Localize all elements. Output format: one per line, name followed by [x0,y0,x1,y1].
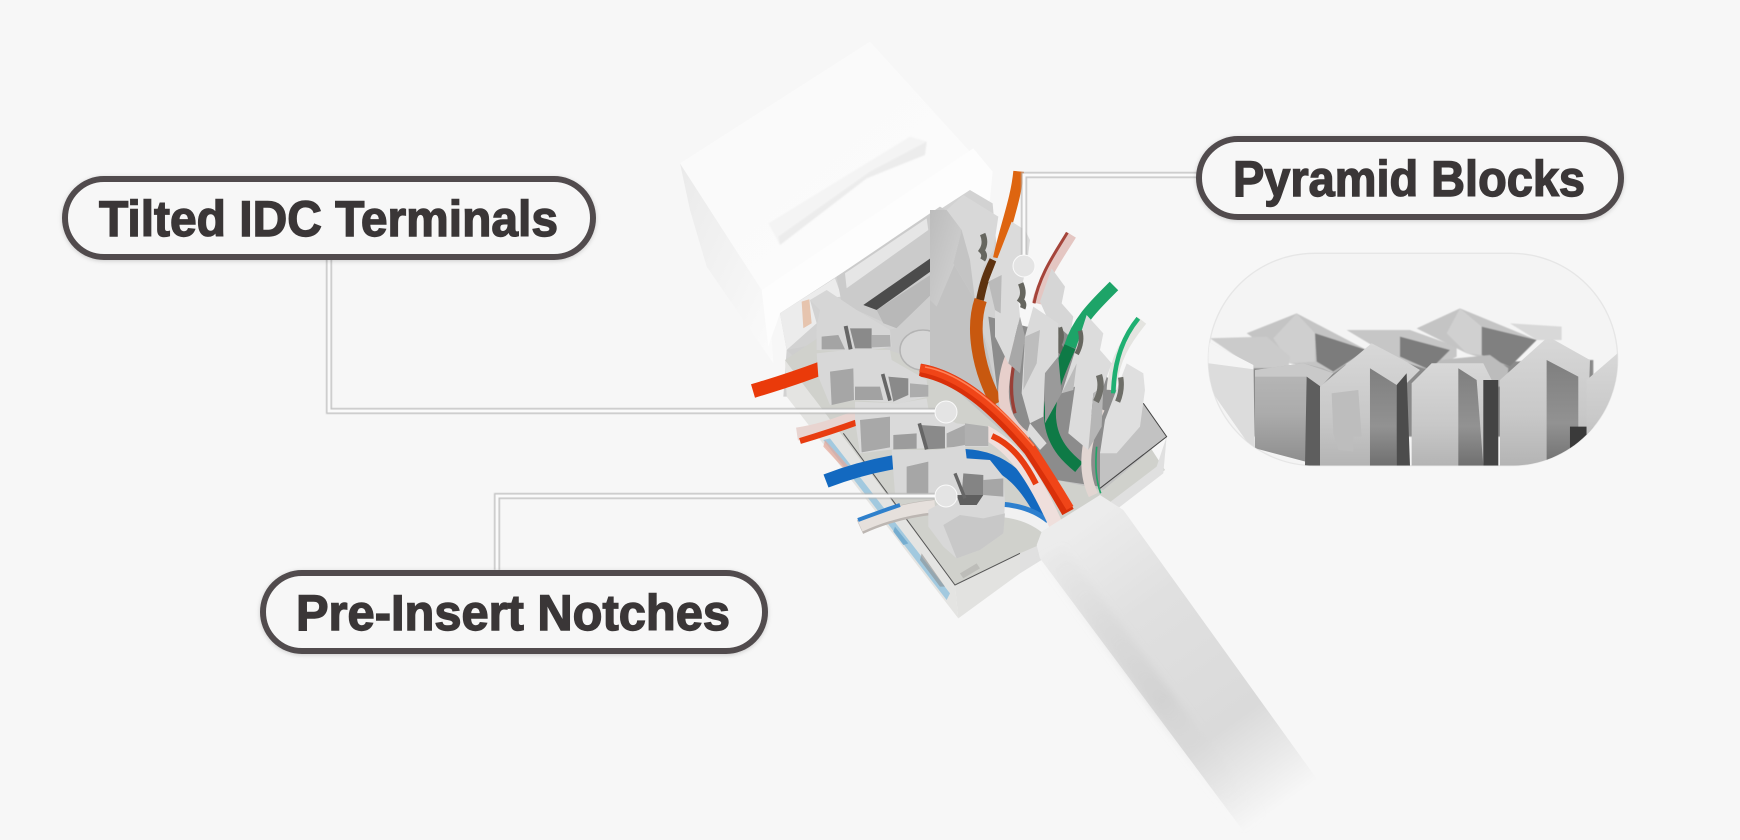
block C rear [1040,268,1073,354]
block E [1100,363,1145,453]
label: Pre-Insert Notches [263,573,765,651]
blue wire [826,456,1047,523]
front row terminal blocks [810,290,1005,558]
plate top [785,330,1165,585]
top face [680,42,970,290]
left conductors [753,367,1070,530]
left face [680,163,773,363]
dark recess behind blocks [988,317,1117,487]
green-white wire [1086,318,1142,495]
floor [787,273,1010,397]
orange-white wire [1004,233,1072,438]
front bar 5 [1586,354,1618,434]
label: Pyramid Blocks: Pyramid Blocks [1233,151,1585,207]
block 3 [855,398,988,453]
product: keystone jack with cable [680,42,1320,840]
front bar 4 [1500,337,1590,466]
front bar 2 with notch [1320,343,1420,466]
base corner line [1100,403,1167,488]
right rear interior and first block [930,171,1167,495]
side with printing [785,360,958,618]
callout leader: Pyramid Blocks [1013,175,1199,277]
orange wire [976,171,1019,403]
jack base plate [785,330,1167,618]
block A [947,195,998,300]
back row of blocks [1210,308,1593,437]
white side wall [1208,342,1255,453]
block 2 [817,350,928,405]
label: Tilted IDC Terminals [65,179,593,257]
label: Pre-Insert Notches: Pre-Insert Notches [296,585,730,641]
block 1 [810,290,892,352]
block B [988,222,1030,373]
plate front [955,553,1020,618]
interior wall [780,190,1010,397]
block 4 [892,445,1005,558]
blue-white wire [858,504,1050,530]
red wire [753,367,1070,512]
front lip [762,148,993,347]
red-white wire [797,416,1056,525]
key rail [768,137,927,245]
jack opening [837,207,957,328]
ethernet cable [1037,495,1320,840]
label: Pyramid Blocks [1199,139,1621,217]
callout leader: Pre-Insert Notches [497,485,957,570]
hub circle [900,330,946,370]
block C [1022,307,1062,450]
jack upper body [680,42,1010,397]
front bar 3 [1412,363,1498,466]
block D [1062,315,1112,450]
label: Tilted IDC Terminals: Tilted IDC Terminals [99,191,558,247]
green wire [1050,286,1114,467]
inset: pyramid blocks close-up [1208,253,1618,466]
callout leader: Tilted IDC Terminals [329,259,957,423]
front bar 1 [1255,363,1333,466]
